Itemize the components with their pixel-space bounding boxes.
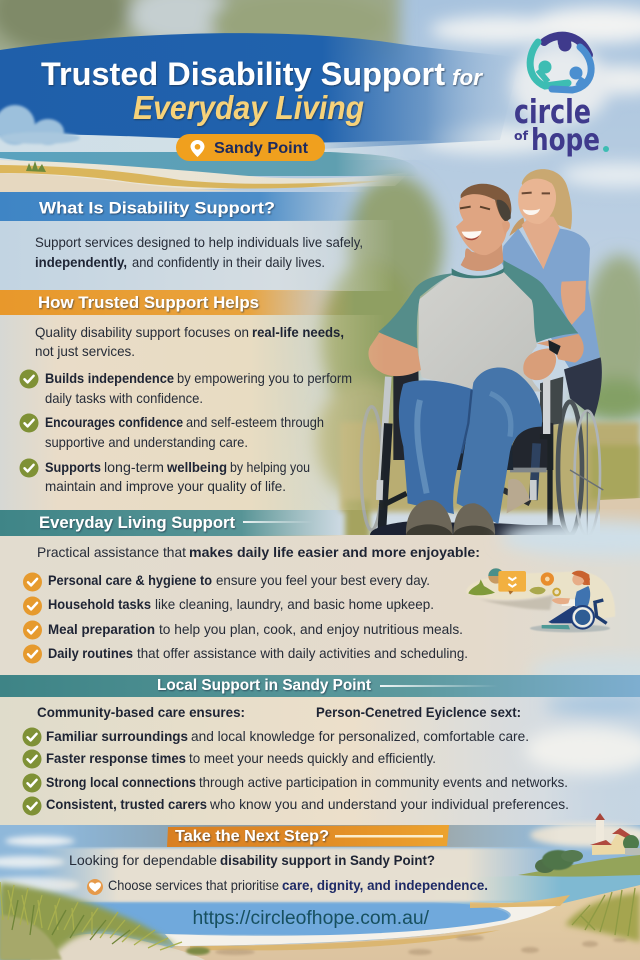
location pill	[176, 134, 325, 161]
benefit: encourages confidence: Encourages confidence	[45, 415, 183, 430]
next step heading bar	[60, 825, 560, 847]
shoes	[406, 500, 495, 535]
intro: not just services.	[35, 344, 135, 359]
benefit: builds independence: Builds independence	[45, 371, 174, 386]
arms and hands	[368, 333, 584, 380]
next step heading bar: Take the Next Step?	[175, 828, 329, 845]
cream text band	[40, 848, 560, 902]
heading bar: How Trusted Support Helps	[38, 293, 259, 312]
item: consistent carers: who know you and understand your individual preferences.	[209, 797, 569, 812]
item: familiar surroundings: Familiar surroundings	[46, 729, 188, 744]
benefit: builds independence	[20, 370, 352, 406]
benefit: supports wellbeing: by helping you	[230, 460, 310, 475]
item: familiar surroundings: and local knowledge for personalized, comfortable care.	[191, 729, 529, 744]
logo: circle of hope	[514, 36, 609, 158]
benefit: encourages confidence	[20, 414, 324, 450]
head	[456, 184, 511, 271]
jeans	[399, 368, 542, 524]
description: independently,	[35, 255, 127, 270]
item: faster response: Faster response times	[46, 751, 186, 766]
title text: for	[452, 65, 483, 90]
item: faster response: to meet your needs quickly and efficiently.	[189, 751, 436, 766]
panel: everyday living support	[0, 510, 640, 688]
panel: take the next step beach scene	[0, 813, 640, 960]
benefit: builds independence: by empowering you to perform	[177, 371, 352, 386]
heading bar	[0, 510, 345, 536]
item: strong local connections: Strong local connections	[46, 775, 196, 790]
item: faster response	[22, 750, 436, 768]
benefit: supports wellbeing	[20, 458, 310, 494]
intro	[35, 325, 344, 359]
intro: Quality disability support focuses on	[35, 325, 249, 340]
item: household tasks: Household tasks	[48, 597, 151, 612]
title text: Trusted Disability Support	[41, 56, 445, 92]
subheadings	[37, 705, 521, 720]
intro	[37, 545, 480, 560]
item: daily routines: that offer assistance with daily activities and scheduling.	[137, 646, 468, 661]
item: meal preparation: Meal preparation	[48, 622, 155, 637]
sea and shore	[70, 874, 640, 960]
item: consistent carers	[22, 796, 569, 816]
panel: local support in sandy point	[0, 675, 640, 825]
benefit: builds independence: daily tasks with confidence.	[45, 391, 203, 406]
banner beach scene	[0, 105, 440, 192]
item: daily routines	[23, 644, 468, 664]
benefit: supports wellbeing: Supports	[45, 460, 101, 475]
item: personal care: ensure you feel your best every day.	[216, 573, 430, 588]
heading bar	[0, 290, 355, 315]
logo ring	[530, 36, 591, 90]
description: Support services designed to help individuals live safely,	[35, 235, 363, 250]
hill, lighthouse and house	[518, 813, 640, 877]
item: consistent carers: Consistent, trusted carers	[46, 797, 207, 812]
item: personal care: Personal care & hygiene to	[48, 573, 212, 588]
question text: Looking for dependable	[69, 853, 217, 868]
item: daily routines: Daily routines	[48, 646, 133, 661]
item: familiar surroundings	[22, 728, 529, 746]
item: household tasks	[23, 596, 434, 616]
carer	[502, 169, 602, 417]
right dune grass	[565, 888, 640, 942]
illustration: person in wheelchair with daily activity icons	[466, 568, 615, 632]
item: meal preparation: to help you plan, cook, and enjoy nutritious meals.	[159, 622, 463, 637]
website url: https://circleofhope.com.au/	[192, 908, 430, 929]
title text	[41, 56, 483, 126]
benefit: encourages confidence: and self-esteem through	[186, 415, 324, 430]
question text: disability support in Sandy Point?	[220, 853, 435, 868]
title text: Everyday Living	[133, 89, 364, 126]
shirt	[378, 260, 578, 392]
benefit: supports wellbeing: wellbeing	[166, 460, 227, 475]
logo: circle of hope: of	[514, 129, 529, 143]
logo: circle of hope: hope	[531, 123, 600, 158]
title banner	[0, 33, 520, 192]
location pill: Sandy Point	[214, 140, 309, 157]
trees behind	[315, 175, 640, 500]
benefit: supports wellbeing: long-term	[104, 460, 164, 475]
icon: heart and call to action: care, dignity, and independence.	[282, 878, 488, 893]
heading bar: Local Support in Sandy Point	[157, 677, 371, 694]
heading bar: What Is Disability Support?	[39, 198, 275, 218]
heading bar	[0, 675, 640, 697]
item: meal preparation	[23, 620, 463, 640]
intro: real-life needs,	[252, 325, 344, 340]
icon: heart and call to action: Choose services that prioritise	[108, 878, 279, 893]
icon: map pin	[190, 140, 204, 157]
panel: what is disability support	[0, 192, 395, 291]
panel: how trusted support helps	[0, 290, 385, 510]
heading bar: Everyday Living Support	[39, 514, 236, 532]
heading bar	[0, 192, 370, 221]
question text	[69, 853, 435, 868]
description	[35, 235, 363, 270]
left dune grass	[0, 882, 210, 960]
intro: Practical assistance that	[37, 545, 186, 560]
logo: circle of hope: circle	[514, 92, 591, 131]
description: and confidently in their daily lives.	[132, 255, 325, 270]
benefit: encourages confidence: supportive and understanding care.	[45, 435, 248, 450]
wheelchair	[361, 367, 603, 536]
item: personal care	[23, 572, 430, 592]
photo: man in wheelchair and carer	[361, 169, 603, 536]
item: strong local connections	[22, 774, 568, 792]
benefit: supports wellbeing: maintain and improve your quality of life.	[45, 479, 286, 494]
item: household tasks: like cleaning, laundry, and basic home upkeep.	[155, 597, 434, 612]
subheadings: Community-based care ensures:	[37, 705, 245, 720]
intro: makes daily life easier and more enjoyable:	[189, 545, 480, 560]
icon: heart and call to action	[87, 878, 488, 895]
item: strong local connections: through active participation in community events and networks.	[199, 775, 568, 790]
subheadings: Person-Cenetred Eyiclence sext:	[316, 705, 521, 720]
